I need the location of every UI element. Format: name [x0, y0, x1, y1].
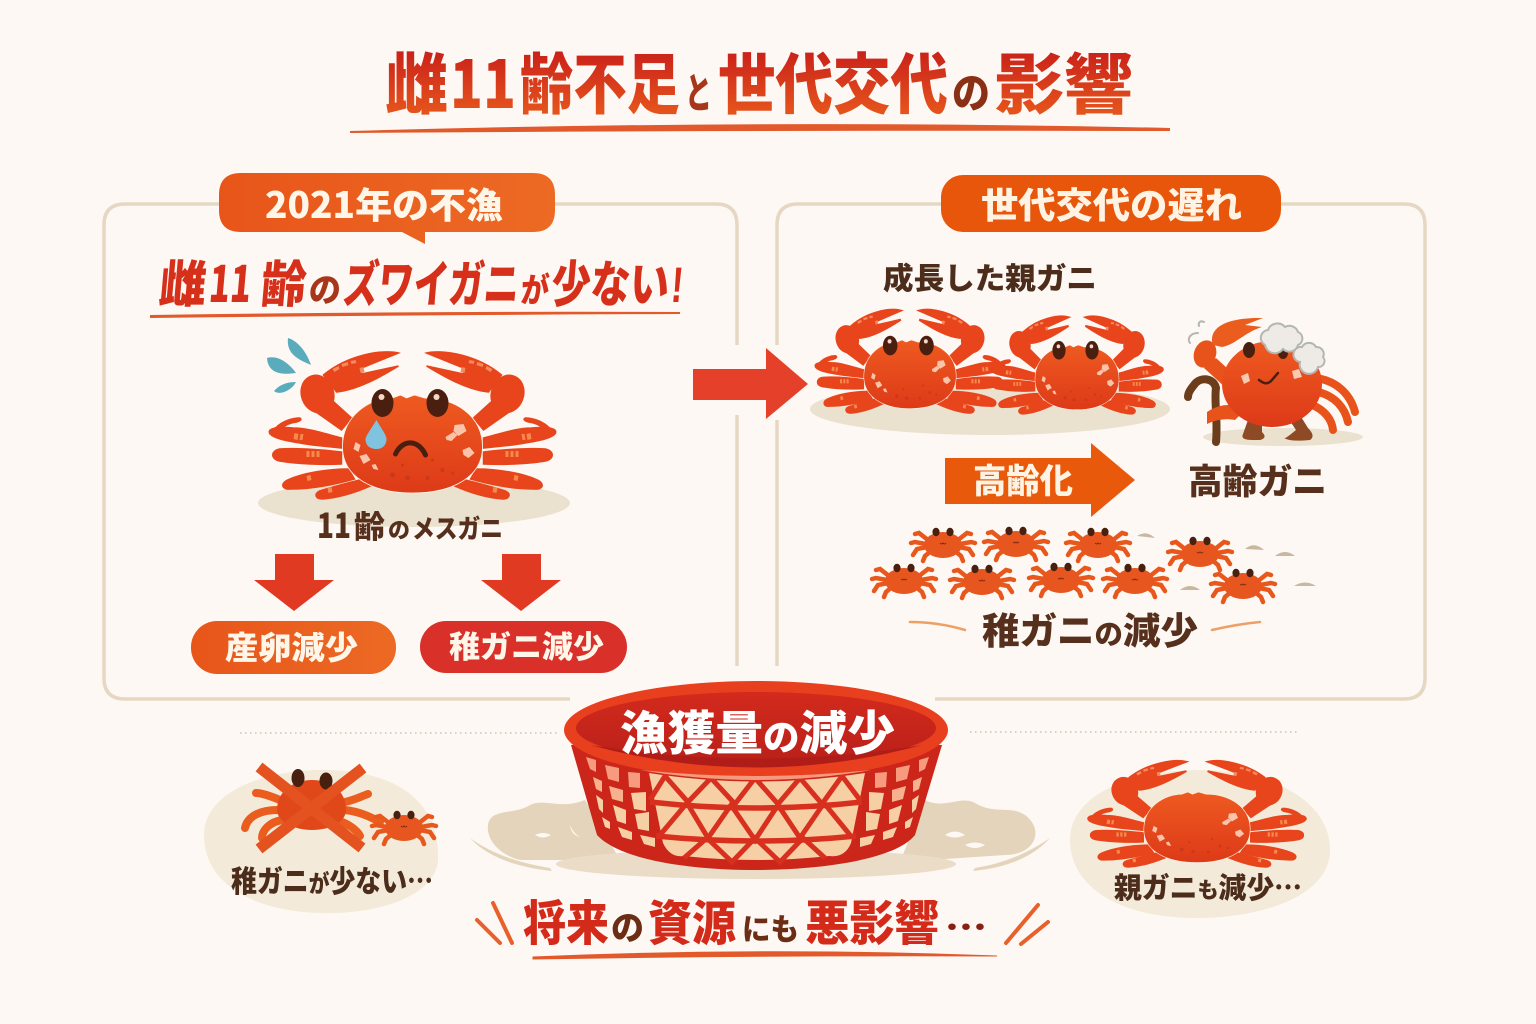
title underline: [350, 124, 1170, 133]
pill: 稚ガニ減少: [420, 621, 627, 673]
sub headline: [157, 245, 687, 317]
panel: 2021年の不漁: [104, 173, 737, 699]
panel frame left: [104, 204, 737, 699]
title: 齢不足: [520, 48, 680, 122]
icon: crying crab: [269, 352, 556, 499]
arrow: connector: [693, 348, 808, 419]
rim highlight: [640, 770, 872, 780]
icon: small crab: [372, 811, 436, 844]
icon: parent crab: [1088, 761, 1306, 867]
shadow under old crab: [1203, 428, 1363, 446]
icon group: juvenile crabs: [872, 527, 1316, 602]
arrow: 高齢化: [945, 443, 1135, 517]
label: 11齢のメスガニ: の: [388, 518, 410, 543]
callout underline: [533, 952, 997, 959]
title: 11: [450, 32, 516, 128]
title: と: [685, 70, 712, 117]
pill heading right: [941, 175, 1281, 232]
pill heading text right: 世代交代の遅れ: [981, 185, 1242, 226]
icon: red basket: [564, 681, 948, 870]
callout text: 資源: [648, 898, 736, 951]
shadow under crying crab: [258, 479, 570, 527]
sub headline underline: [150, 312, 680, 318]
title: 世代交代: [718, 48, 948, 122]
arrow: down left: [254, 554, 334, 611]
callout text: …: [945, 899, 987, 951]
sub headline: の: [307, 272, 342, 310]
sub headline: 齢: [259, 257, 309, 313]
sub headline: ズワイガニ: [341, 257, 522, 313]
pill heading left: [219, 173, 555, 244]
callout: future resources: [477, 898, 1048, 959]
pill: 産卵減少: [191, 621, 396, 674]
side windows right: [860, 757, 929, 847]
label: 成長した親ガニ: 成長した親ガニ: [883, 262, 1097, 296]
basket rim: [564, 681, 948, 779]
callout text: の: [611, 910, 644, 948]
shadow under parent crabs: [810, 383, 1170, 435]
label: 稚ガニの減少: 稚ガニの減少: [982, 611, 1198, 652]
pill: 産卵減少: 産卵減少: [225, 630, 358, 666]
label: 11齢のメスガニ: メスガニ: [412, 514, 503, 544]
panel: few juveniles: [204, 767, 438, 913]
callout text: 将来: [523, 898, 609, 951]
label: 11齢のメスガニ: [317, 499, 503, 548]
backdrop blob: [1070, 770, 1330, 918]
label: 11齢のメスガニ: 11: [317, 499, 351, 548]
title: の: [952, 70, 990, 117]
sub headline: 雌: [157, 257, 209, 313]
title: 影響: [995, 48, 1133, 122]
panel frame right: [777, 204, 1425, 699]
label: 11齢のメスガニ: 齢: [354, 510, 385, 545]
icon: sweat drops: [267, 338, 311, 393]
icon: parent crab 2: [991, 317, 1163, 414]
side windows left: [586, 757, 655, 847]
sub headline: 11: [207, 245, 255, 317]
title: 雌: [385, 48, 448, 122]
dotted rule left: [240, 732, 560, 734]
accent lines: [477, 903, 1048, 944]
sub headline: !: [669, 257, 686, 313]
label: 高齢ガニ: 高齢ガニ: [1188, 463, 1327, 502]
basket body: [571, 745, 942, 870]
icon: old crab: [1188, 318, 1355, 442]
arrow: 高齢化: 高齢化: [973, 463, 1073, 501]
callout text: にも: [742, 914, 799, 947]
title: [385, 32, 1133, 128]
basket interior: [576, 692, 936, 764]
label: 親ガニも減少: 親ガニも減少…: [1114, 865, 1302, 907]
callout text: [523, 898, 987, 951]
sub headline: が: [519, 271, 551, 310]
callout text: 悪影響: [805, 898, 939, 951]
basket label: 漁獲量の減少: [620, 707, 895, 760]
splash under basket: [470, 800, 1050, 879]
label: 稚ガニが少ない: 稚ガニが少ない…: [231, 857, 433, 901]
panel: 世代交代の遅れ: [777, 175, 1425, 699]
center lattice: [649, 773, 865, 862]
icon: parent crab 1: [816, 310, 1004, 413]
backdrop blob: [204, 770, 438, 913]
icon: crossed-out crab: [245, 767, 380, 849]
pill: 稚ガニ減少: 稚ガニ減少: [449, 630, 604, 665]
arrow: down right: [481, 554, 561, 611]
pill heading text left: 2021年の不漁: [265, 177, 503, 229]
panel: parents decline: [1070, 761, 1330, 918]
sub headline: 少ない: [549, 257, 672, 313]
dotted rule right: [970, 731, 1300, 733]
